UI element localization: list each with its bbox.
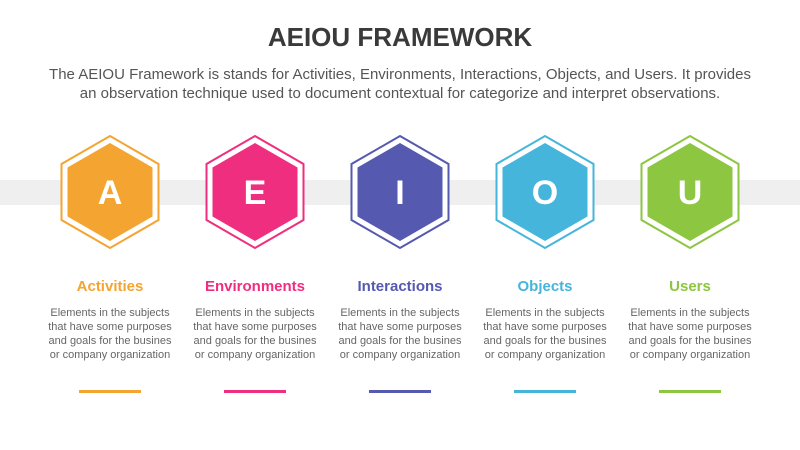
column: Users: Elements in the subjects <box>630 307 750 319</box>
hexagon I <box>352 136 448 248</box>
column: Activities: or company organization <box>50 349 170 361</box>
column: Activities: Activities <box>77 278 143 295</box>
column: Activities <box>48 278 172 361</box>
hexagon I: I <box>395 174 405 212</box>
hexagon A: A <box>98 174 122 212</box>
hexagon E <box>206 136 304 248</box>
column: Interactions <box>338 278 462 361</box>
hexagon A <box>62 136 158 248</box>
column: Objects: and goals for the busines <box>484 335 606 347</box>
column: Environments: and goals for the busines <box>194 335 316 347</box>
hexagon O <box>496 136 594 248</box>
column: Environments: or company organization <box>195 349 315 361</box>
hexagon O: O <box>532 174 558 212</box>
column: Objects: Objects <box>517 278 573 295</box>
hexagon E: E <box>244 174 266 212</box>
column: Objects: or company organization <box>485 349 605 361</box>
column: Interactions: Elements in the subjects <box>340 307 460 319</box>
column: Objects: that have some purposes <box>483 321 607 333</box>
underline bars <box>79 390 721 393</box>
column: Environments: Environments <box>205 278 305 295</box>
column: Objects <box>483 278 607 361</box>
column: Activities: that have some purposes <box>48 321 172 333</box>
subtitle: an observation technique used to document contextual for categorize and interpret observations. <box>80 85 720 102</box>
column: Interactions: Interactions <box>357 278 443 295</box>
column: Interactions: and goals for the busines <box>339 335 461 347</box>
subtitle: The AEIOU Framework is stands for Activities, Environments, Interactions, Objects, and Users. It provides <box>49 66 751 83</box>
column: Environments: that have some purposes <box>193 321 317 333</box>
column: Users: that have some purposes <box>628 321 752 333</box>
background band <box>0 180 800 205</box>
column: Users: or company organization <box>630 349 750 361</box>
column: Environments: Elements in the subjects <box>195 307 315 319</box>
column: Environments <box>193 278 317 361</box>
subtitle <box>49 66 751 102</box>
column: Activities: Elements in the subjects <box>50 307 170 319</box>
column: Users: Users <box>669 278 711 295</box>
column: Interactions: or company organization <box>340 349 460 361</box>
hexagon U: U <box>678 174 702 212</box>
column: Objects: Elements in the subjects <box>485 307 605 319</box>
column: Users <box>628 278 752 361</box>
column: Users: and goals for the busines <box>629 335 751 347</box>
title: AEIOU FRAMEWORK <box>268 22 532 52</box>
column: Activities: and goals for the busines <box>49 335 171 347</box>
column: Interactions: that have some purposes <box>338 321 462 333</box>
hexagon U <box>642 136 738 248</box>
